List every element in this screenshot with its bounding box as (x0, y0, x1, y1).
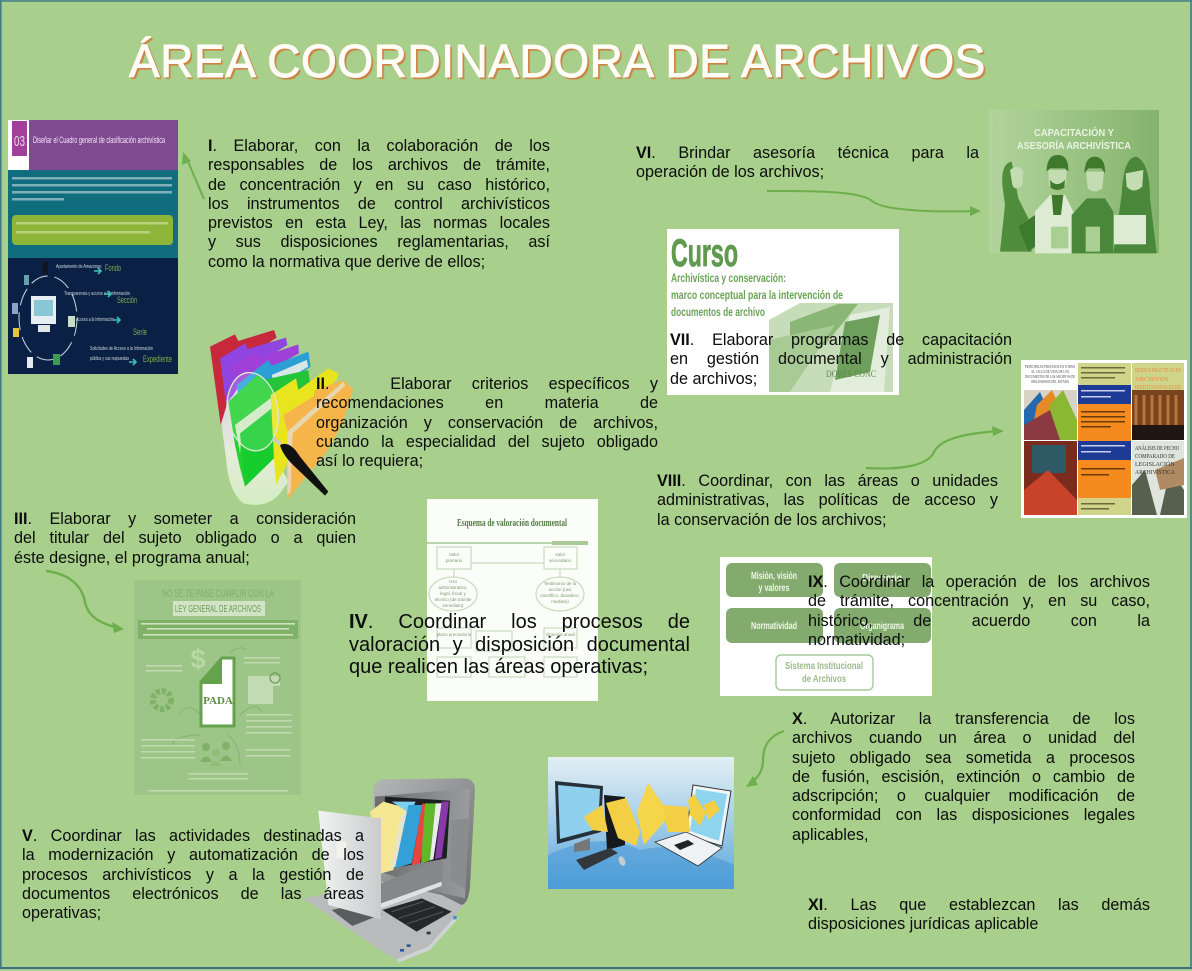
image: esquema de valoración documental: Valor (555, 552, 566, 557)
image: collage de guías y buenas prácticas: PRINCIPALES PROCESOS EN TORNO (1025, 364, 1075, 369)
image: esquema de valoración documental: Esquema de valoración documental (457, 518, 567, 529)
image: carpetas de colores con lupa (210, 330, 353, 505)
text block: item X: adscripción; o cualquier modificación de (792, 787, 1135, 805)
image: collage de guías y buenas prácticas: ANÁLISIS DE PECHO (1135, 444, 1179, 452)
text block: item X: conformidad con las disposiciones legales (792, 806, 1135, 824)
image: sistema institucional de archivos: y valores (758, 583, 790, 594)
image: collage de guías y buenas prácticas: LEGISLACIÓN (1135, 460, 1175, 468)
image: cuadro general de clasificación: pública y sus respuestas (90, 356, 129, 362)
image: esquema de valoración documental: plazo precautorio (437, 632, 472, 637)
text block: item III: III. Elaborar y someter a consideración (14, 510, 356, 528)
text block: item I: y sus disposiciones reglamentarias, así (208, 233, 550, 251)
arrow: item III to PADA (46, 571, 124, 633)
text block: item VII: en gestión documental y administración (670, 350, 1012, 368)
text block: item I: I. Elaborar, con la colaboración de los (208, 137, 550, 155)
image: cuadro general de clasificación: Transparencia y acceso a la información (64, 291, 130, 297)
text block: item IV: que realicen las áreas operativas; (349, 656, 648, 678)
text block: item VII (670, 331, 1012, 388)
text block: item XI (808, 896, 1150, 933)
text block: item I: previstos en esta Ley, las normas locales (208, 214, 550, 232)
image: capacitación y asesoría archivística: CAPACITACIÓN Y (1034, 126, 1114, 139)
image: capacitación y asesoría archivística: ASESORÍA ARCHIVÍSTICA (1017, 139, 1131, 152)
image: PADA ley general de archivos: NO SE TE PASE CUMPLIR CON LA (162, 588, 274, 600)
image: esquema de valoración documental: mediato) (551, 599, 569, 604)
image: collage de guías y buenas prácticas (1021, 360, 1187, 518)
text block: item IX: IX. Coordinar la operación de los archivos (808, 573, 1150, 591)
arrow: item VIII to collage (866, 426, 1004, 468)
image: curso archivística y conservación: Curso (671, 232, 738, 275)
text block: item X: aplicables, (792, 826, 868, 844)
text block: item I: como la normativa que derive de ellos; (208, 252, 485, 270)
image: PADA ley general de archivos (134, 580, 301, 795)
image: collage de guías y buenas prácticas: COMPARADO DE (1135, 454, 1175, 460)
text block: item VIII (657, 472, 998, 528)
text block: item VIII: VIII. Coordinar, con las áreas o unidades (657, 472, 998, 490)
text block: item X (792, 710, 1135, 844)
image: sistema institucional de archivos: Sistema Institucional (785, 661, 863, 672)
arrow: item X to image (746, 731, 784, 787)
image: curso archivística y conservación: Archivística y conservación: (671, 271, 786, 285)
text block: item I (208, 137, 550, 270)
image: collage de guías y buenas prácticas: ARCHIVOS (1135, 376, 1169, 383)
image: cuadro general de clasificación: Solicitudes de Acceso a la Información (90, 346, 153, 352)
text block: item II: así lo requiera; (316, 452, 423, 470)
text block: item XI: XI. Las que establezcan las demás (808, 896, 1150, 914)
image: cuadro general de clasificación: Expediente (143, 354, 172, 364)
image: esquema de valoración documental: legal, fiscal y (440, 591, 467, 596)
image: cuadro general de clasificación: Apartamento de Amazonas: (56, 264, 102, 270)
image: sistema institucional de archivos: Normatividad (751, 621, 797, 632)
text block: item I: responsables de los archivos de trámite, (208, 156, 550, 174)
image: collage de guías y buenas prácticas: ORGANISMOS DEL ESTADO (1031, 379, 1069, 384)
image: collage de guías y buenas prácticas: DOCUMENTOS DE LOS ARCHIVOS DE (1025, 374, 1075, 379)
image: collage de guías y buenas prácticas: ARCHIVÍSTICA (1135, 468, 1176, 476)
image: esquema de valoración documental: primario (446, 558, 463, 563)
arrow: item I to image (182, 152, 204, 199)
image: esquema de valoración documental: administrativo, (438, 585, 468, 590)
image: collage de guías y buenas prácticas: AL CICLO DE VIDA DE LOS (1031, 369, 1069, 374)
text block: item VIII: la conservación de los archivos; (657, 510, 886, 528)
image: PADA ley general de archivos: PADA (203, 695, 233, 707)
text block: item I: los instrumentos de control archivísticos (208, 195, 550, 213)
image: laptop con carpetas (303, 778, 475, 963)
text block: item IV: IV. Coordinar los procesos de (349, 611, 690, 633)
image: cuadro general de clasificación: Diseñar el Cuadro general de clasificación archivística (33, 135, 165, 145)
text block: item IX (808, 573, 1150, 649)
text block: item IV: valoración y disposición documental (349, 634, 690, 656)
text block: item V: la modernización y automatización de los (22, 846, 364, 864)
text block: item II: II. Elaborar criterios específicos y (316, 375, 658, 393)
arrow: item VI to capacitación image (767, 191, 981, 216)
image: esquema de valoración documental (427, 499, 598, 701)
text block: item II (316, 375, 658, 470)
text block: item V (22, 827, 364, 922)
image: sistema institucional de archivos: Misión, visión (751, 571, 797, 582)
text block: item III (14, 510, 356, 566)
text block: item VIII: administrativas, las políticas de acceso y (657, 491, 998, 509)
text block: item V: procesos archivísticos y a la gestión de (22, 866, 364, 884)
image: esquema de valoración documental: Valor (449, 552, 460, 557)
image: esquema de valoración documental: técnico (de trámite (434, 597, 472, 602)
text block: item V: documentos electrónicos de las áreas (22, 885, 364, 903)
text block: item X: sujeto obligado sea sometida a procesos (792, 748, 1135, 766)
image: sistema institucional de archivos: Organigrama (860, 621, 904, 632)
text block: item II: cuando la especialidad del sujeto obligado (316, 433, 658, 451)
image: PADA ley general de archivos: $ (190, 644, 206, 674)
text block: item VII: de archivos; (670, 370, 757, 388)
text block: item II: organización y conservación de archivos, (316, 414, 658, 432)
image: esquema de valoración documental: Vigencia anual (545, 632, 575, 637)
text block: item IX: histórico, de acuerdo con la (808, 612, 1150, 630)
image: esquema de valoración documental: Uso (449, 579, 457, 584)
text block: item X: de fusión, escisión, extinción o cambio de (792, 768, 1135, 786)
image: curso archivística y conservación (667, 229, 899, 395)
text block: item VII: VII. Elaborar programas de capacitación (670, 331, 1012, 349)
text block: item VI: VI. Brindar asesoría técnica para la (636, 144, 979, 162)
image: sistema institucional de archivos: Directorio (862, 573, 902, 584)
text block: item III: del titular del sujeto obligado o a quien (14, 529, 356, 547)
text block: item IX: de trámite, concentración y, en su caso, (808, 592, 1150, 610)
image: curso archivística y conservación: DORES CONC (826, 369, 876, 379)
text block: item IV (349, 611, 690, 678)
text block: item II: recomendaciones en materia de (316, 394, 658, 412)
image: capacitación y asesoría archivística (989, 110, 1159, 253)
image: curso archivística y conservación: documentos de archivo (671, 305, 765, 319)
image: esquema de valoración documental: acción (uso (548, 587, 572, 592)
image: esquema de valoración documental: inmediato) (442, 603, 464, 608)
text block: item VI (636, 144, 979, 181)
image: cuadro general de clasificación: Fondo (105, 263, 121, 273)
text block: item X: X. Autorizar la transferencia de los (792, 710, 1135, 728)
image: transferencia entre computadoras (548, 757, 734, 889)
image: cuadro general de clasificación (8, 120, 178, 374)
text block: item V: V. Coordinar las actividades destinadas a (22, 827, 364, 845)
title: ÁREA COORDINADORA DE ARCHIVOS (129, 35, 986, 87)
image: sistema institucional de archivos (720, 557, 932, 696)
image: PADA ley general de archivos: LEY GENERAL DE ARCHIVOS (175, 604, 261, 615)
image: curso archivística y conservación: marco conceptual para la intervención de (671, 288, 843, 302)
image: cuadro general de clasificación: 03 (14, 133, 25, 150)
image: cuadro general de clasificación: Serie (133, 327, 147, 337)
text block: item VI: operación de los archivos; (636, 163, 824, 181)
image: cuadro general de clasificación: Acceso a la Información (76, 317, 114, 323)
text block: item IX: normatividad; (808, 631, 905, 649)
text block: item X: archivos cuando un área o unidad del (792, 729, 1135, 747)
image: esquema de valoración documental: científico, duradero, (540, 593, 580, 598)
image: esquema de valoración documental: secundario (549, 558, 572, 563)
image: sistema institucional de archivos: de Archivos (802, 674, 846, 685)
text block: item I: de concentración y en su caso histórico, (208, 176, 550, 194)
text block: item V: operativas; (22, 904, 101, 922)
image: esquema de valoración documental: Testimonio de la (544, 581, 577, 586)
text block: item III: éste designe, el programa anual; (14, 548, 250, 566)
text block: item XI: disposiciones jurídicas aplicable (808, 915, 1038, 933)
image: cuadro general de clasificación: Sección (117, 295, 137, 305)
